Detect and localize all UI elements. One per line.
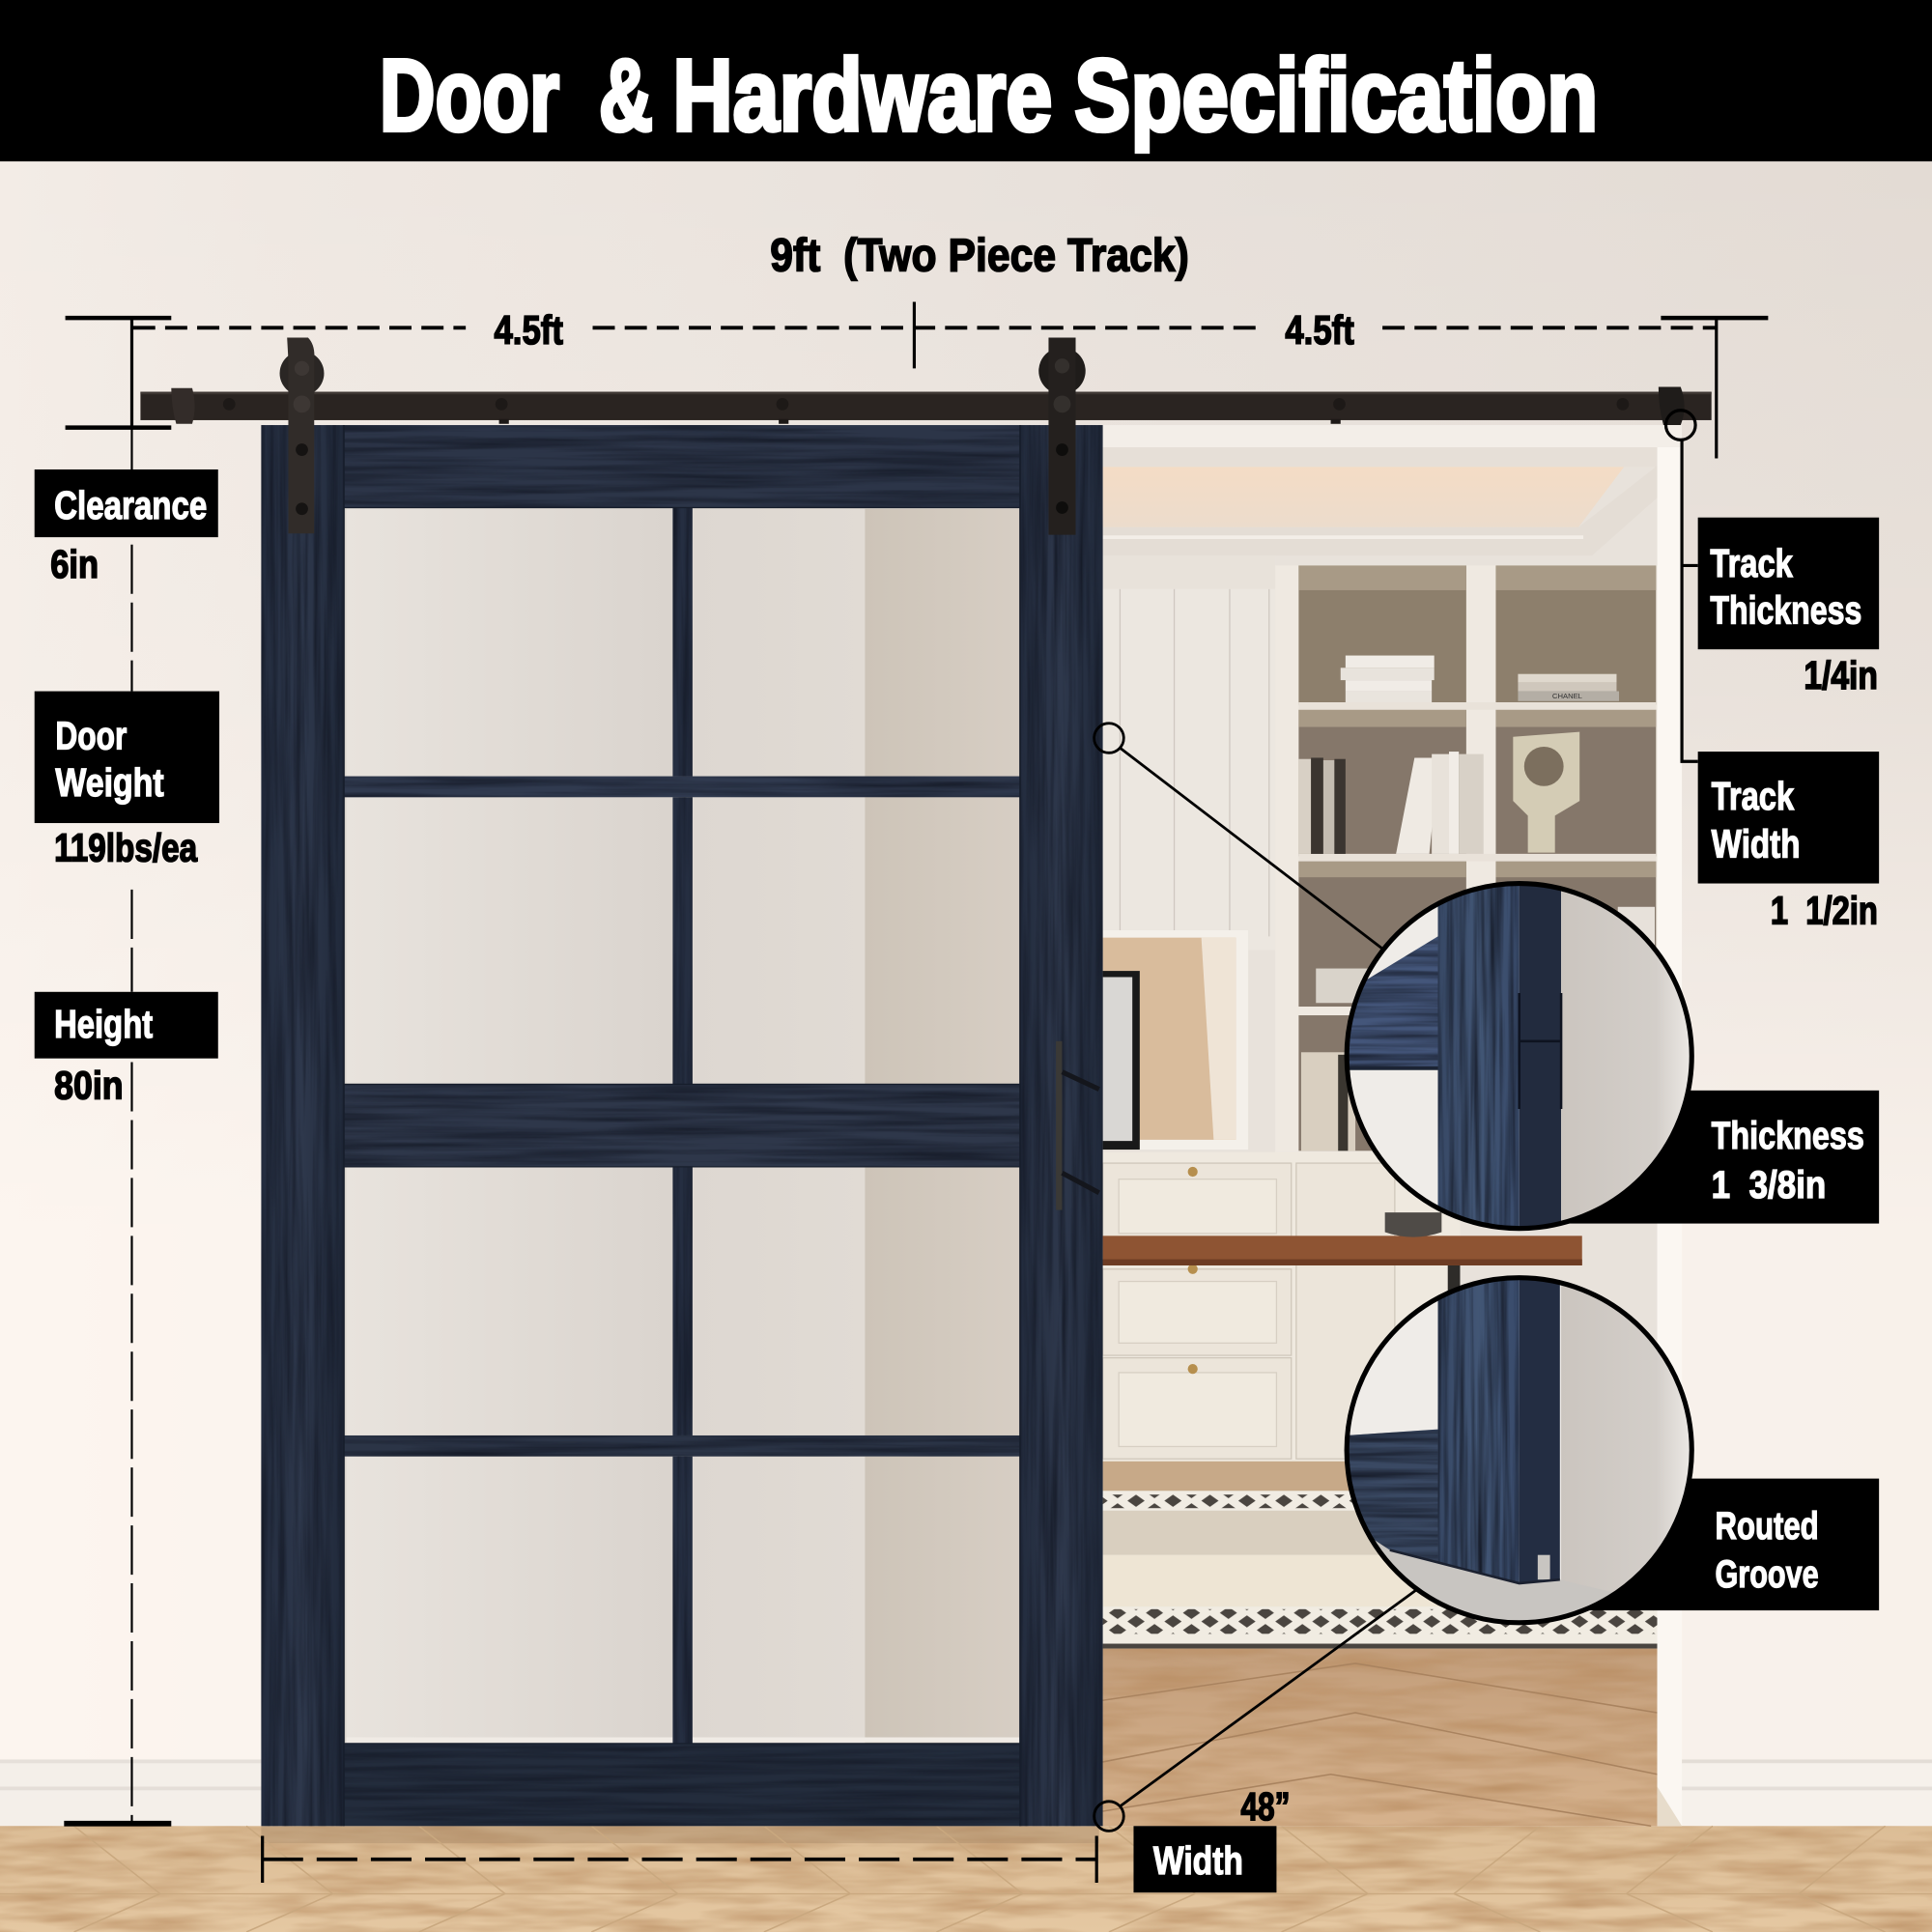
track stoppers <box>171 387 1685 425</box>
label: track thickness: Thickness <box>1710 587 1861 632</box>
label: door weight: Door <box>55 714 127 758</box>
sliding track <box>140 392 1712 424</box>
label: left half of track: 4.5ft <box>494 307 563 353</box>
barn door <box>261 425 1103 1826</box>
small stacked books and low shelf <box>1316 969 1373 1003</box>
label: track width <box>1698 752 1879 933</box>
heading: total track length: 9ft (Two Piece Track) <box>770 230 1189 282</box>
label: clearance: 6in <box>50 542 99 586</box>
ceiling glow <box>1103 467 1624 527</box>
label: door width: Width <box>1153 1838 1243 1883</box>
baseboard left and right <box>0 1759 1932 1826</box>
label: track thickness: 1/4in <box>1804 653 1878 697</box>
dimension: door height line <box>64 428 171 1824</box>
label: door width: 48” <box>1240 1784 1290 1829</box>
label: clearance: Clearance <box>54 483 207 527</box>
label: door width <box>1133 1784 1290 1892</box>
bookcase <box>1275 565 1658 1152</box>
callout: detail thickness magnified circle <box>1343 881 1700 1233</box>
label: door thickness: Thickness <box>1712 1115 1864 1157</box>
leader: routed groove callout <box>1094 1589 1417 1831</box>
title: Hardware <box>672 39 1052 153</box>
dimension: track length line <box>133 301 1717 368</box>
bowl <box>1385 1212 1441 1237</box>
label: height: Height <box>54 1002 153 1046</box>
title: Door <box>380 39 559 153</box>
title banner <box>0 0 1932 161</box>
label: track width: Width <box>1712 822 1801 867</box>
art print <box>1103 930 1248 1150</box>
cabinets <box>1103 1152 1460 1466</box>
label: clearance <box>35 469 218 586</box>
door frame rails and stiles <box>261 425 1103 1826</box>
dimension: clearance bracket <box>66 318 171 428</box>
books <box>1346 656 1435 668</box>
dimension: right track end bracket <box>1661 318 1768 458</box>
title: Specification <box>1074 39 1598 153</box>
callout: routed groove magnified circle <box>1343 1275 1700 1627</box>
leader: door thickness callout <box>1094 724 1382 949</box>
left hanger <box>280 337 324 533</box>
door glass panes <box>344 508 1020 1745</box>
label: track thickness <box>1698 518 1879 697</box>
room back wall <box>1103 425 1658 1826</box>
title: & <box>599 39 653 153</box>
label: track width: Track <box>1712 774 1794 818</box>
right hanger <box>1038 337 1086 535</box>
wood floor <box>0 1826 1932 1932</box>
label: door weight: 119lbs/ea <box>54 826 197 870</box>
dimension: door width line <box>263 1836 1096 1883</box>
label: door weight <box>35 692 219 870</box>
leader: track thickness and width <box>1665 411 1698 761</box>
label: routed groove <box>1520 1479 1879 1610</box>
label: routed groove: Groove <box>1716 1553 1819 1596</box>
label: track thickness: Track <box>1710 541 1793 585</box>
crown moulding <box>1103 466 1658 555</box>
label: routed groove: Routed <box>1716 1505 1819 1548</box>
label: door weight: Weight <box>55 760 164 805</box>
beadboard wall <box>1103 555 1275 950</box>
label: track width: 1 1/2in <box>1771 889 1878 933</box>
rug and floor <box>1103 1462 1658 1491</box>
label: door thickness: 1 3/8in <box>1712 1164 1826 1207</box>
label: door thickness <box>1520 1091 1879 1224</box>
doorway scene <box>1103 425 1682 1826</box>
title <box>380 39 1598 153</box>
label: height: 80in <box>54 1064 124 1108</box>
door pull handle <box>1056 1041 1099 1210</box>
table <box>1448 1265 1460 1302</box>
door jamb <box>1658 447 1682 1826</box>
door frame soffit <box>1103 425 1682 447</box>
label: height <box>35 992 218 1108</box>
label: right half of track: 4.5ft <box>1285 307 1354 353</box>
sculpture <box>1513 732 1579 853</box>
doorway scene: CHANEL <box>1552 692 1582 700</box>
